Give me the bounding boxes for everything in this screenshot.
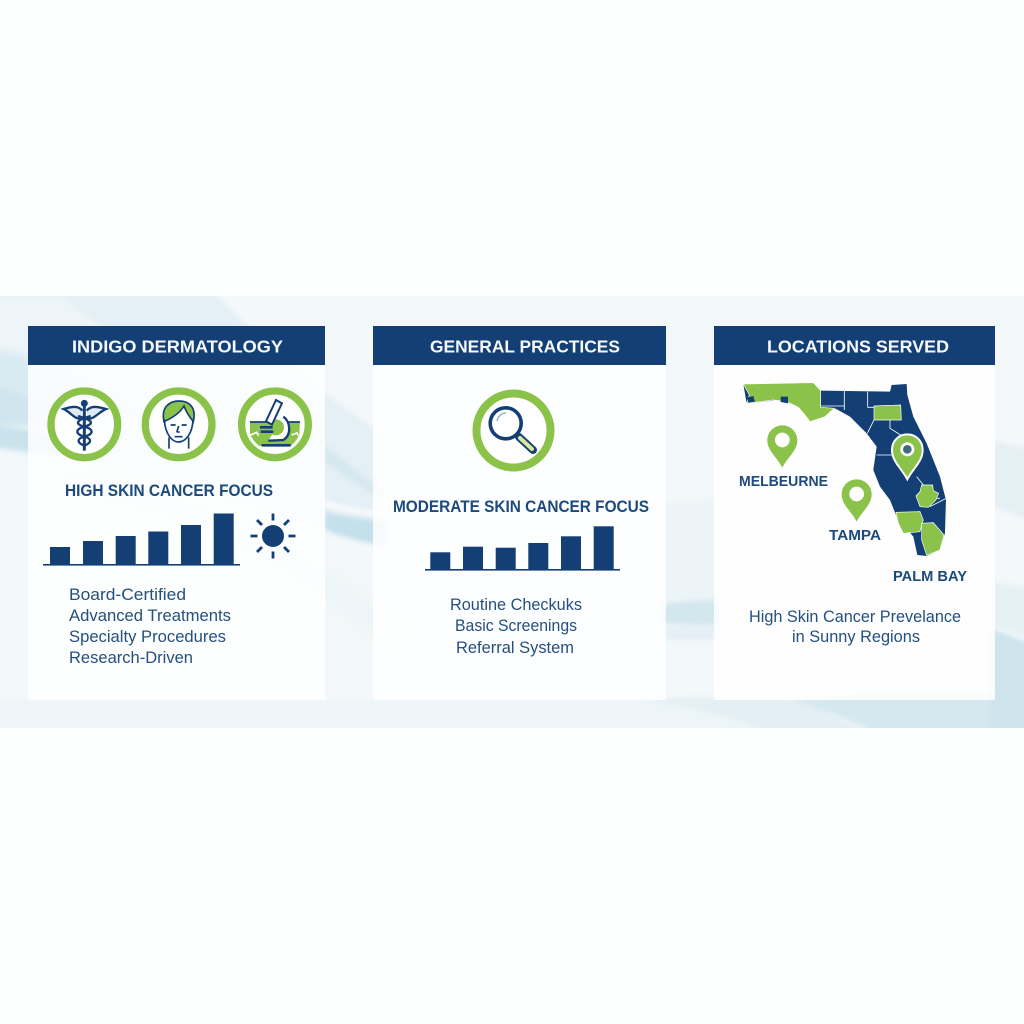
subheading: high skin cancer focus: HIGH SKIN CANCER FOCUS: [65, 482, 273, 500]
header: General Practices: [373, 326, 666, 365]
icon: sun: [250, 514, 296, 558]
caption: high skin cancer prevalence: [749, 608, 961, 646]
map: Florida: [743, 383, 946, 556]
icon: face: [145, 391, 212, 458]
icon: microscope: [242, 391, 308, 458]
bar chart: Indigo Dermatology: [43, 514, 240, 566]
panel: Indigo Dermatology: [28, 326, 325, 700]
pin: Melbourne: [767, 425, 797, 468]
pin: central Florida: [892, 434, 923, 479]
text list: General Practices features: Routine Checkuks: [450, 596, 582, 614]
background wave band: [0, 290, 1024, 740]
label: Palm Bay: PALM BAY: [893, 569, 967, 585]
caption: high skin cancer prevalence: in Sunny Regions: [792, 628, 920, 646]
header: Locations Served: [714, 326, 995, 365]
text list: General Practices features: [450, 596, 582, 657]
text list: Indigo features: Research-Driven: [69, 649, 193, 667]
pin: Tampa: [842, 479, 872, 522]
text list: Indigo features: Board-Certified: [69, 586, 186, 604]
text list: General Practices features: Referral System: [456, 639, 574, 657]
icon: magnifying glass: [476, 394, 550, 468]
panel: Locations Served: [714, 326, 995, 700]
text list: Indigo features: [69, 586, 231, 667]
header: Indigo Dermatology: [28, 326, 325, 365]
icon: caduceus: [51, 391, 118, 458]
panel: General Practices: [373, 326, 666, 700]
subheading: moderate skin cancer focus: MODERATE SKIN CANCER FOCUS: [393, 498, 649, 516]
bar chart: General Practices: [425, 526, 620, 571]
text list: General Practices features: Basic Screenings: [455, 617, 577, 635]
caption: high skin cancer prevalence: High Skin Cancer Prevelance: [749, 608, 961, 626]
label: Melbourne: MELBEURNE: [739, 474, 828, 490]
text list: Indigo features: Specialty Procedures: [69, 628, 226, 646]
label: Tampa: TAMPA: [829, 528, 882, 544]
text list: Indigo features: Advanced Treatments: [69, 607, 231, 625]
header: Locations Served: LOCATIONS SERVED: [767, 336, 949, 356]
header: General Practices: GENERAL PRACTICES: [430, 336, 620, 356]
header: Indigo Dermatology: INDIGO DERMATOLOGY: [72, 336, 283, 356]
